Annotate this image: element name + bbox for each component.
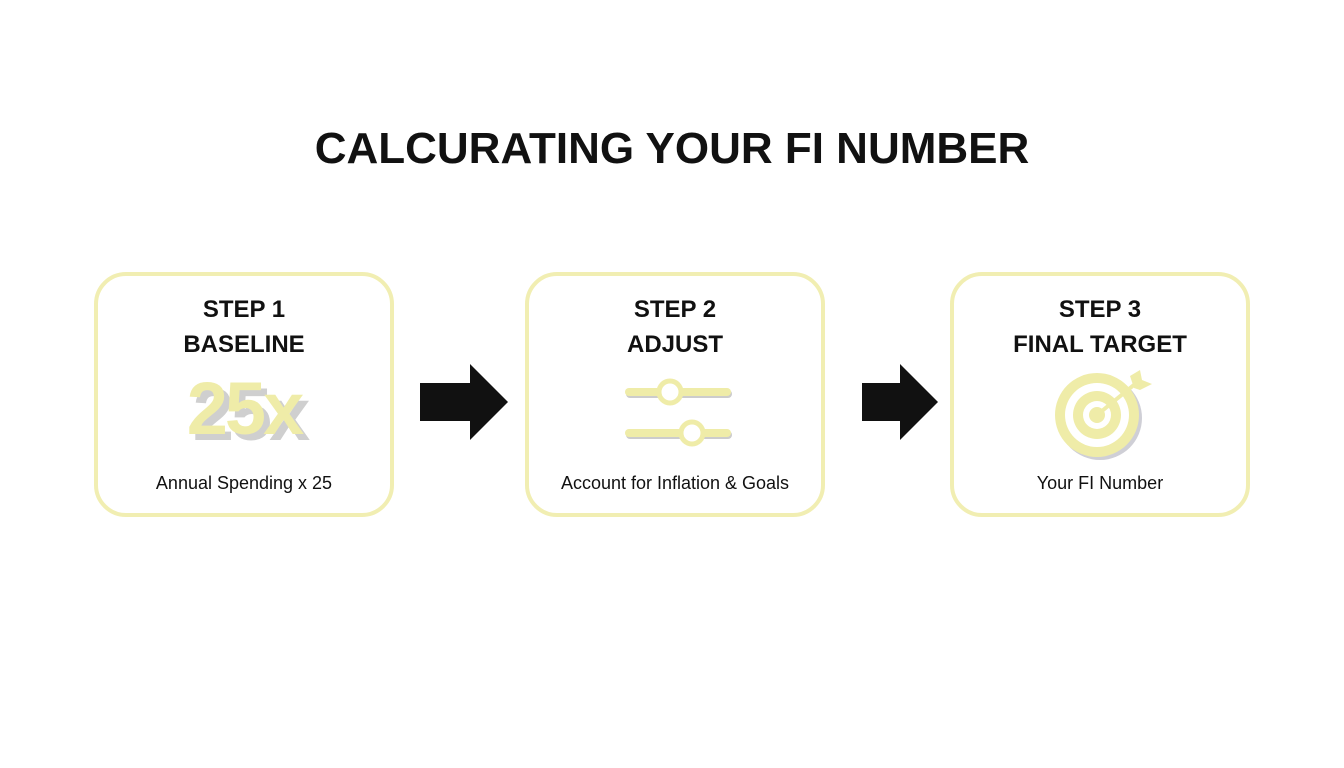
heading: step 3 bbox=[1013, 296, 1187, 358]
heading: step 1: STEP 1 bbox=[203, 296, 285, 323]
caption: step 1: Annual Spending x 25 bbox=[156, 473, 332, 493]
heading: step 2: ADJUST bbox=[627, 331, 723, 358]
heading: step 2 bbox=[627, 296, 723, 358]
heading: step 3: FINAL TARGET bbox=[1013, 331, 1187, 358]
caption: step 2: Account for Inflation & Goals bbox=[561, 473, 789, 493]
panel: step 1 bbox=[94, 272, 394, 517]
arrow 2 bbox=[862, 364, 938, 440]
icon: target bbox=[1055, 370, 1152, 460]
caption: step 3: Your FI Number bbox=[1037, 473, 1163, 493]
panel: step 2 bbox=[525, 272, 825, 517]
title: CALCURATING YOUR FI NUMBER bbox=[315, 124, 1029, 173]
heading: step 3: STEP 3 bbox=[1059, 296, 1141, 323]
panel: step 3 bbox=[950, 272, 1250, 517]
heading: step 1: BASELINE bbox=[183, 331, 305, 358]
heading: step 2: STEP 2 bbox=[634, 296, 716, 323]
arrow 1 bbox=[420, 364, 508, 440]
icon: sliders bbox=[625, 378, 732, 446]
heading: step 1 bbox=[183, 296, 305, 358]
icon: 25x: 25x bbox=[187, 367, 301, 450]
